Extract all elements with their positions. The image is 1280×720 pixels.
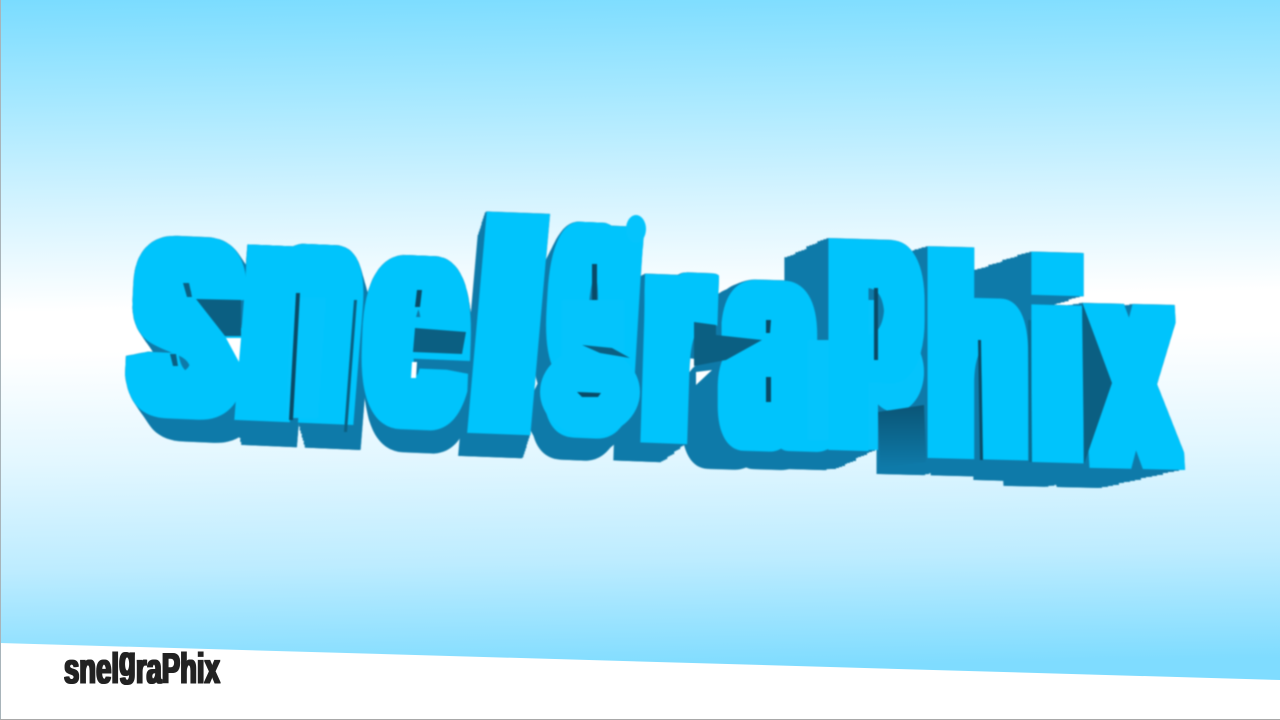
logo front faces: P: [830, 186, 919, 504]
logo extrusion depth: l: [465, 170, 552, 487]
logo front faces: n: [232, 142, 372, 479]
logo front faces: g: [545, 132, 648, 433]
logo extrusion depth: g: [545, 132, 648, 433]
logo extrusion depth: x: [1085, 207, 1178, 521]
small black logo: g: [119, 636, 136, 685]
logo extrusion depth: e: [364, 157, 470, 481]
main 3D logo wordmark: [129, 132, 1178, 521]
logo extrusion depth: n: [232, 142, 372, 479]
white bottom band: [0, 643, 1280, 720]
logo front faces: e: [364, 157, 470, 481]
logo front faces: a: [726, 183, 816, 502]
small black logo: raPhix: [136, 644, 220, 693]
dark slits and gaps on letter faces: [170, 264, 1112, 468]
logo front faces: r: [640, 176, 712, 498]
logo front faces: l: [465, 170, 552, 487]
logo extrusion depth: i: [1033, 212, 1082, 513]
logo extrusion depth: a: [726, 183, 816, 502]
logo extrusion depth: P: [830, 186, 919, 504]
logo extrusion depth: r: [640, 176, 712, 498]
small black logo: snel: [64, 644, 119, 693]
logo extrusion depth: [129, 132, 1178, 521]
logo front faces: h: [929, 206, 1026, 510]
logo front faces: [129, 132, 1178, 521]
small black logo: [64, 636, 220, 693]
logo front faces: x: [1085, 207, 1178, 521]
logo extrusion depth: s: [129, 133, 248, 473]
logo front faces: s: [129, 133, 248, 473]
logo extrusion depth: h: [929, 206, 1026, 510]
logo front faces: i: [1033, 212, 1082, 513]
